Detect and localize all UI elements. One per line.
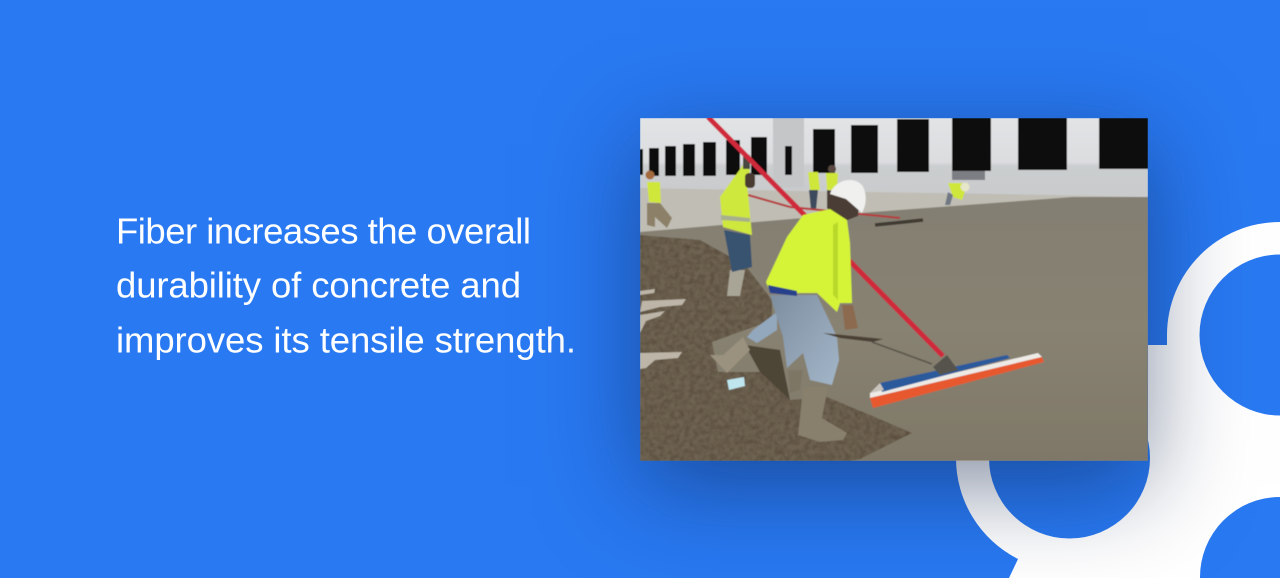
long red pole — [708, 117, 943, 356]
pad ground — [640, 188, 1148, 240]
hose and small screed — [748, 195, 923, 225]
building windows — [640, 118, 1148, 180]
back worker — [720, 155, 755, 296]
front worker — [710, 180, 883, 442]
shadow under worker — [745, 345, 790, 400]
building wall — [640, 118, 1148, 198]
dirt mound — [640, 235, 912, 461]
poured concrete slab — [640, 197, 1148, 461]
body text: Fiber increases the overall — [116, 210, 531, 252]
body text: durability of concrete and — [116, 264, 521, 306]
photo: workers screeding wet concrete — [640, 118, 1148, 461]
body text — [116, 210, 576, 360]
screed tool — [870, 342, 1044, 408]
white patches on dirt — [640, 289, 686, 369]
body text: improves its tensile strength. — [116, 320, 576, 360]
plastic cup — [727, 377, 745, 390]
distant workers — [646, 165, 970, 228]
